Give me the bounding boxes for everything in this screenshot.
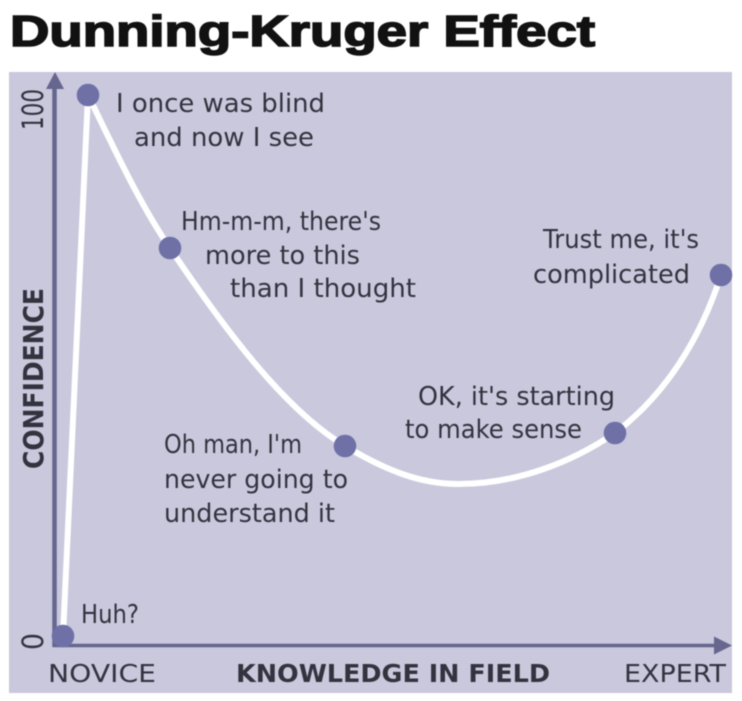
y axis arrow (46, 72, 64, 647)
annotation: complicated (533, 225, 699, 290)
confidence curve (63, 95, 721, 636)
y axis label: 0: 0 (16, 633, 50, 650)
annotation: never going to understand: Oh man, I'm (164, 430, 302, 460)
x axis arrow (53, 636, 732, 654)
annotation: more to this: Hm-m-m, there's (181, 207, 381, 237)
annotation: starting to make sense: OK, it's starting (418, 382, 615, 412)
y axis title: confidence: CONFIDENCE (17, 288, 50, 469)
annotation: starting to make sense (405, 382, 615, 445)
annotation: complicated: Trust me, it's (542, 225, 699, 255)
x axis title: knowledge in field: KNOWLEDGE IN FIELD (236, 659, 550, 688)
annotation: never going to understand (164, 430, 348, 529)
x axis label: novice: NOVICE (48, 659, 156, 688)
annotation: never going to understand: never going to (164, 465, 348, 495)
annotation: huh: Huh? (81, 600, 139, 630)
annotation: never going to understand: understand it (164, 499, 335, 529)
annotation: blind (116, 89, 325, 153)
y axis label: 100: 100 (16, 89, 50, 130)
annotation: blind: I once was blind (116, 89, 325, 119)
annotation: more to this: more to this (205, 241, 360, 271)
annotation: starting to make sense: to make sense (405, 415, 582, 445)
annotation: blind: and now I see (134, 123, 314, 153)
x axis label: expert: EXPERT (624, 659, 727, 688)
curve data points (52, 84, 732, 647)
annotation: complicated: complicated (533, 260, 690, 290)
title: Dunning-Kruger Effect (10, 7, 595, 56)
annotation: more to this (181, 207, 416, 304)
annotation: more to this: than I thought (230, 274, 416, 304)
